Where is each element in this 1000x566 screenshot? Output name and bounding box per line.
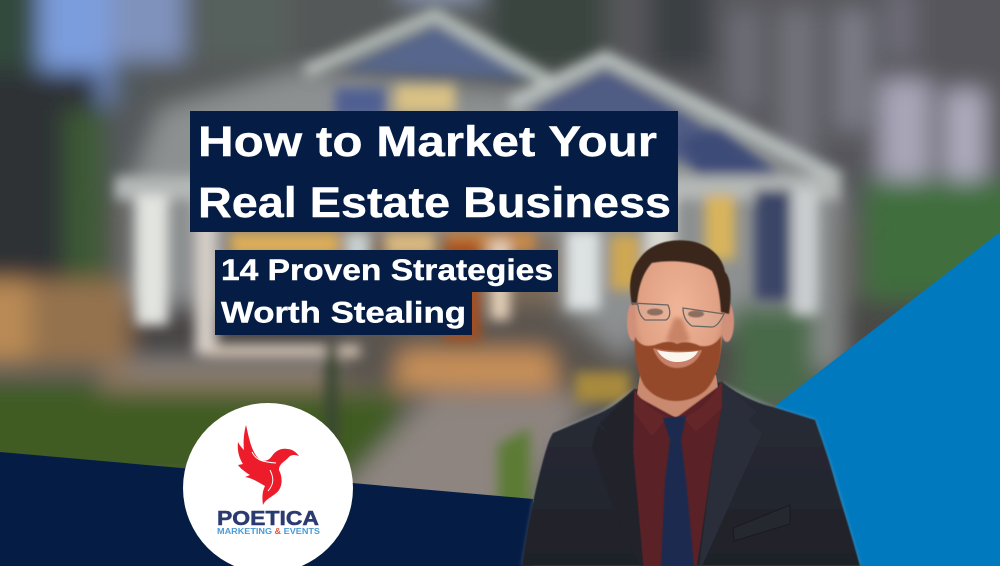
face bbox=[635, 260, 722, 400]
title box bbox=[190, 111, 678, 232]
subtitle box bbox=[215, 250, 558, 335]
white circle bbox=[183, 403, 353, 566]
logo badge bbox=[183, 403, 353, 566]
nose shading bbox=[666, 318, 690, 344]
navy bottom-left wedge bbox=[0, 452, 533, 566]
phoenix icon bbox=[238, 425, 299, 505]
beard bbox=[635, 336, 721, 401]
presenter portrait bbox=[522, 240, 860, 566]
ears bbox=[627, 302, 734, 342]
wordmark POETICA: POETICA bbox=[217, 508, 319, 530]
eyes bbox=[647, 308, 704, 318]
right lapel bbox=[699, 384, 762, 566]
title line one: How to Market Your bbox=[198, 118, 657, 166]
jacket pocket bbox=[733, 505, 790, 541]
soft halo around jacket bbox=[522, 383, 860, 566]
subtitle bbox=[215, 250, 558, 335]
shirt bbox=[633, 384, 722, 566]
subtitle line one: 14 Proven Strategies bbox=[221, 254, 553, 287]
shirt collar bbox=[634, 380, 722, 436]
jacket bbox=[522, 382, 860, 566]
title bbox=[190, 111, 678, 232]
hair bbox=[630, 240, 731, 314]
smile bbox=[657, 350, 698, 362]
lower lip bbox=[653, 348, 702, 368]
subtitle line two: Worth Stealing bbox=[221, 296, 466, 330]
tagline: MARKETING & EVENTS bbox=[217, 527, 321, 536]
glasses bbox=[632, 303, 724, 327]
neck bbox=[636, 375, 720, 418]
title line two: Real Estate Business bbox=[198, 179, 671, 227]
left lapel bbox=[592, 390, 643, 566]
blue right triangle bbox=[775, 232, 1000, 566]
tie bbox=[661, 416, 694, 566]
